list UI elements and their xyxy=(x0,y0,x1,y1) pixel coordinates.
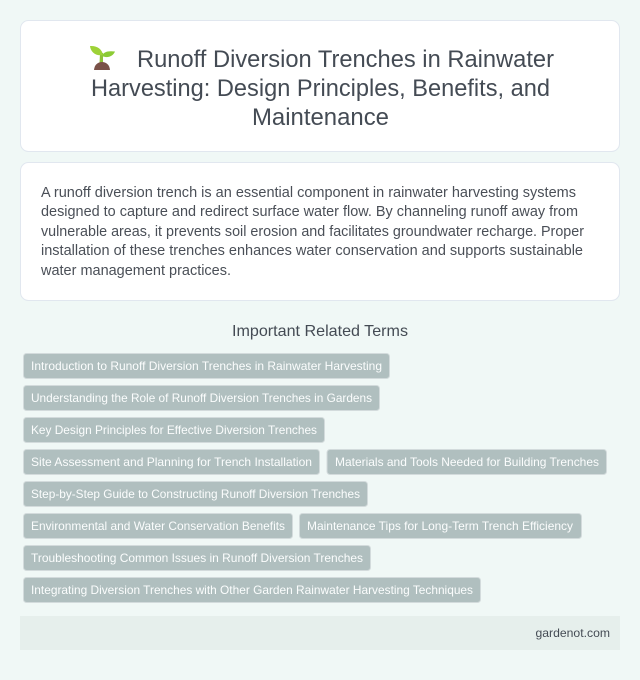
chip: introduction: Introduction to Runoff Diversion Trenches in Rainwater Harvesting xyxy=(31,359,382,373)
footer bar xyxy=(20,616,620,650)
description text: designed to capture and redirect surface water flow. By channeling runoff away from xyxy=(41,204,578,220)
footer source text: gardenot.com xyxy=(536,626,610,640)
description text: A runoff diversion trench is an essential component in rainwater harvesting systems xyxy=(41,185,576,201)
chip: environmental benefits: Environmental and Water Conservation Benefits xyxy=(31,519,285,533)
chip: environmental benefits xyxy=(24,514,292,538)
chip: troubleshooting: Troubleshooting Common Issues in Runoff Diversion Trenches xyxy=(31,551,363,565)
chip: maintenance tips xyxy=(300,514,582,538)
description text: vulnerable areas, it prevents soil erosion and facilitates groundwater recharge. Proper xyxy=(41,224,584,240)
description text: water management practices. xyxy=(40,263,231,279)
chip: materials and tools: Materials and Tools Needed for Building Trenches xyxy=(335,455,599,469)
title text: Harvesting: Design Principles, Benefits, and xyxy=(91,75,550,102)
chip: integrating xyxy=(24,578,480,602)
heading: important related terms: Important Related Terms xyxy=(232,323,408,340)
description text: installation of these trenches enhances water conservation and supports sustainable xyxy=(41,243,583,259)
chip: key design principles: Key Design Principles for Effective Diversion Trenches xyxy=(31,423,317,437)
chip: key design principles xyxy=(24,418,324,442)
title text: Runoff Diversion Trenches in Rainwater xyxy=(137,46,554,73)
chip: integrating: Integrating Diversion Trenches with Other Garden Rainwater Harvesting Techniques xyxy=(31,583,473,597)
description text xyxy=(40,185,584,279)
chip: understanding the role: Understanding the Role of Runoff Diversion Trenches in Gardens xyxy=(31,391,372,405)
chip: site assessment: Site Assessment and Planning for Trench Installation xyxy=(31,455,312,469)
icon: seedling xyxy=(90,46,115,70)
chip: step-by-step guide xyxy=(24,482,368,506)
chip: introduction xyxy=(24,354,390,378)
panel: title card xyxy=(20,20,620,152)
chip: understanding the role xyxy=(24,386,380,410)
title text xyxy=(91,46,554,131)
title text: Maintenance xyxy=(252,104,389,131)
panel: description card xyxy=(20,162,620,300)
chip: step-by-step guide: Step-by-Step Guide to Constructing Runoff Diversion Trenches xyxy=(31,487,360,501)
related terms chips xyxy=(24,354,606,602)
chip: maintenance tips: Maintenance Tips for Long-Term Trench Efficiency xyxy=(307,519,573,533)
chip: troubleshooting xyxy=(24,546,370,570)
chip: site assessment xyxy=(24,450,320,474)
chip: materials and tools xyxy=(327,450,606,474)
